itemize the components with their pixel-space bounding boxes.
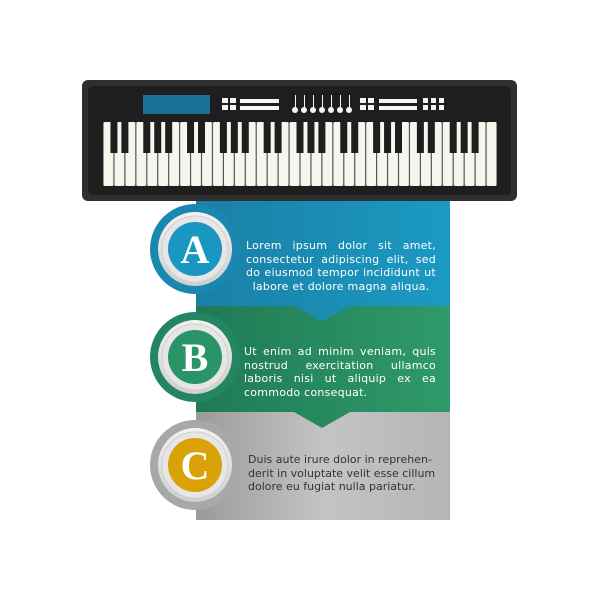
- panel: C gray: [196, 412, 450, 520]
- text block A: Lorem ipsum dolor sit amet, consectetur adipiscing elit, sed do eiusmod tempor incididunt ut labore et dolore magna aliqua.: [246, 239, 436, 293]
- circle A: A: [181, 227, 210, 272]
- circle B: B: [182, 335, 208, 380]
- panel: A blue: [196, 198, 450, 321]
- circle C: [150, 420, 240, 510]
- text block C: Duis aute irure dolor in reprehen-: [248, 453, 432, 466]
- text block C: derit in voluptate velit esse cillum: [248, 467, 435, 480]
- text block C: dolore eu fugiat nulla pariatur.: [248, 480, 415, 493]
- text block C: [248, 453, 435, 493]
- circle C: C: [181, 443, 209, 488]
- circle A: [150, 204, 240, 294]
- text block B: Ut enim ad minim veniam, quis nostrud exercitation ullamco laboris nisi ut aliquip ex ea commodo consequat.: [244, 345, 436, 399]
- panel: B green: [196, 306, 450, 428]
- keyboard: [82, 80, 517, 201]
- circle B: [150, 312, 240, 402]
